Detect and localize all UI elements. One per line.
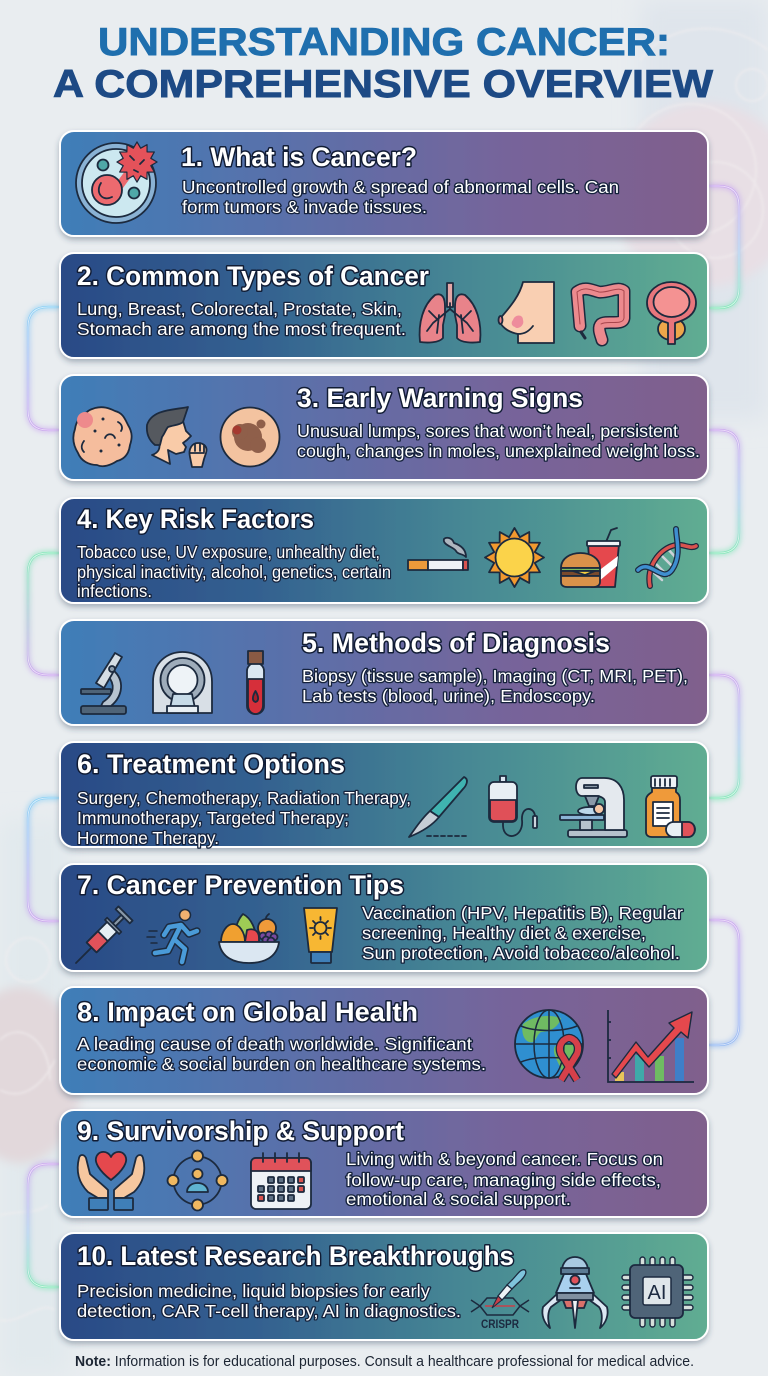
icon: nanobot (542, 1257, 608, 1328)
heading: 6. Treatment Options (77, 749, 345, 779)
body text: Hormone Therapy. (77, 828, 219, 848)
body text: economic & social burden on healthcare systems. (77, 1054, 486, 1074)
icon: DNA helix (638, 529, 696, 586)
body text (77, 1281, 461, 1321)
panel: 7 prevention tips (60, 864, 708, 971)
heading: 5. Methods of Diagnosis (302, 628, 610, 658)
body text (346, 1149, 663, 1209)
panel: 3 early warning signs (60, 375, 708, 480)
connector: card 4 to 5 (28, 553, 59, 675)
body text: emotional & social support. (346, 1189, 571, 1209)
body text: Stomach are among the most frequent. (77, 319, 406, 339)
footnote: Note: Information is for educational purposes. Consult a healthcare professional for medical advice. (75, 1354, 694, 1370)
heading: 10. Latest Research Breakthroughs (77, 1241, 514, 1271)
body text: Immunotherapy, Targeted Therapy; (77, 808, 349, 828)
body text: Lab tests (blood, urine), Endoscopy. (302, 686, 595, 706)
icon: microscope (81, 653, 126, 714)
icon: lungs (420, 283, 480, 343)
title (53, 21, 713, 106)
icon: calendar (251, 1153, 311, 1209)
icon: globe with ribbon (515, 1010, 583, 1080)
connector: card 2 to 3 (28, 307, 59, 430)
body text (362, 903, 683, 963)
icon: colon (577, 289, 624, 340)
label: AI: AI (648, 1282, 666, 1304)
icon: CRISPR dropper and DNA (471, 1270, 529, 1331)
title: A COMPREHENSIVE OVERVIEW (53, 63, 713, 106)
body text: detection, CAR T-cell therapy, AI in diagnostics. (77, 1301, 461, 1321)
icon: pill bottle (646, 776, 695, 837)
heading: 8. Impact on Global Health (77, 997, 418, 1027)
connector: card 6 to 7 (28, 798, 59, 921)
icon: chemo IV bag (489, 776, 537, 836)
chart: rising trend (608, 1010, 694, 1082)
body text (77, 1034, 486, 1074)
icon: scalpel (409, 777, 468, 837)
icon: prostate and bladder (647, 282, 696, 344)
panel: 10 research breakthroughs (60, 1233, 708, 1340)
title: UNDERSTANDING CANCER: (98, 21, 670, 64)
heading: 7. Cancer Prevention Tips (77, 870, 404, 900)
icon: hands holding heart (78, 1152, 144, 1210)
icon: mole (220, 408, 280, 466)
body text (77, 542, 391, 601)
connector: card 5 to 6 (709, 675, 739, 798)
body text: physical inactivity, alcohol, genetics, certain (77, 562, 391, 582)
body text: Surgery, Chemotherapy, Radiation Therapy, (77, 788, 411, 808)
icon: syringe (69, 906, 133, 970)
icon: petri dish with cancer cell (76, 142, 157, 223)
body text: Biopsy (tissue sample), Imaging (CT, MRI, PET), (302, 666, 688, 686)
body text: follow-up care, managing side effects, (346, 1170, 661, 1190)
icon: radiation machine (560, 778, 627, 837)
heading: 2. Common Types of Cancer (77, 261, 429, 291)
connector: card 7 to 8 (709, 920, 739, 1045)
icon: sunscreen (304, 908, 337, 963)
icon: fruit bowl (219, 914, 279, 963)
panel: 9 survivorship (60, 1110, 708, 1217)
body text: cough, changes in moles, unexplained weight loss. (297, 441, 700, 461)
body text (77, 299, 406, 339)
icon: blood test tube (247, 651, 264, 714)
body text: Precision medicine, liquid biopsies for early (77, 1281, 430, 1301)
body text: Uncontrolled growth & spread of abnormal cells. Can (182, 177, 619, 197)
icon: breast (498, 282, 554, 343)
label: CRISPR: CRISPR (481, 1319, 520, 1331)
panel: 1 what is cancer (60, 131, 708, 236)
body text: form tumors & invade tissues. (182, 197, 427, 217)
icon: MRI scanner (153, 652, 212, 713)
heading: 4. Key Risk Factors (77, 504, 314, 534)
icon: lump (73, 407, 132, 466)
icon: cigarette (408, 538, 468, 570)
icon: sun (485, 528, 544, 587)
icon: runner (147, 910, 197, 962)
body text: infections. (77, 581, 152, 601)
connector: card 3 to 4 (709, 430, 739, 553)
body text: Living with & beyond cancer. Focus on (346, 1149, 663, 1169)
heading: 1. What is Cancer? (181, 142, 417, 172)
panel: 8 global health (60, 987, 708, 1094)
body text: Lung, Breast, Colorectal, Prostate, Skin, (77, 299, 402, 319)
body text (297, 421, 700, 461)
icon: AI chip (622, 1257, 693, 1327)
body text (302, 666, 688, 706)
icon: coughing person (147, 407, 207, 467)
body text: screening, Healthy diet & exercise, (362, 923, 646, 943)
icon: support circle (168, 1150, 228, 1210)
body text: Unusual lumps, sores that won’t heal, persistent (297, 421, 678, 441)
body text: Sun protection, Avoid tobacco/alcohol. (362, 943, 680, 963)
heading: 3. Early Warning Signs (297, 383, 583, 413)
heading: 9. Survivorship & Support (77, 1116, 404, 1146)
body text (77, 788, 411, 848)
body text: Vaccination (HPV, Hepatitis B), Regular (362, 903, 683, 923)
panel: 2 common types (60, 253, 708, 358)
panel: 6 treatment options (60, 742, 708, 848)
panel: 5 methods of diagnosis (60, 620, 708, 725)
panel: 4 key risk factors (60, 498, 708, 603)
icon: burger and soda (561, 528, 620, 587)
connector: card 9 to 10 (28, 1164, 59, 1287)
connector: card 1 to 2 (709, 186, 739, 308)
body text: Tobacco use, UV exposure, unhealthy diet, (77, 542, 380, 562)
body text (182, 177, 619, 217)
body text: A leading cause of death worldwide. Significant (77, 1034, 472, 1054)
